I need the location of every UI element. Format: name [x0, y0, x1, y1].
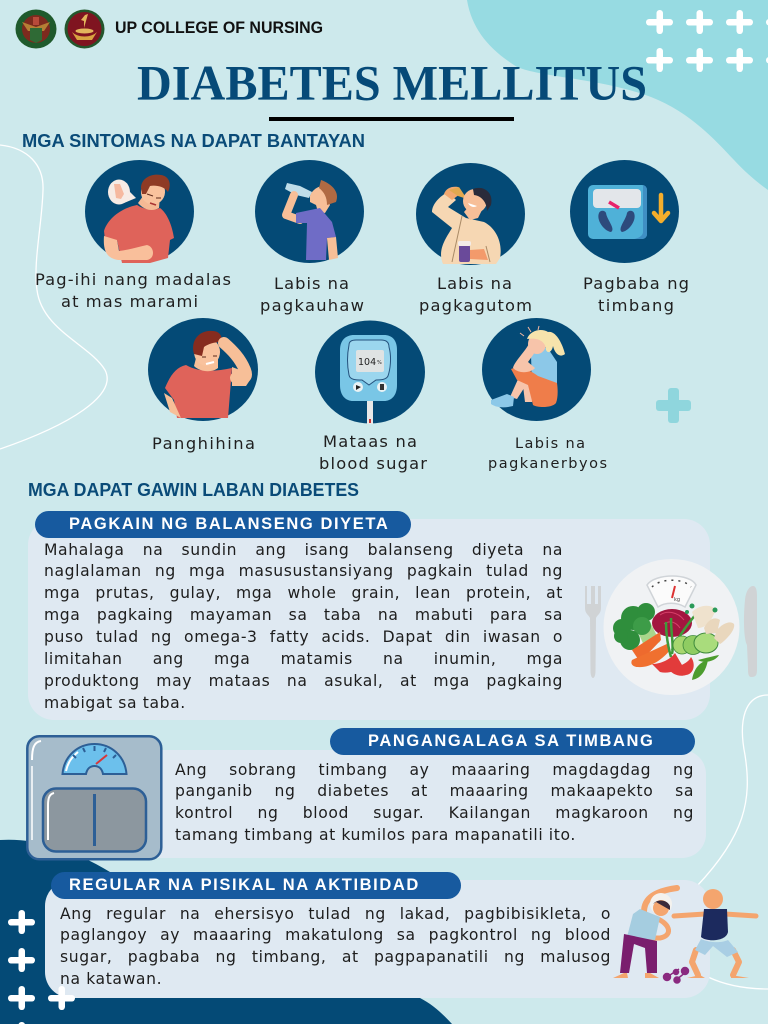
heading: symptoms: MGA SINTOMAS NA DAPAT BANTAYAN [22, 131, 365, 151]
icon: stretching couple [613, 888, 756, 983]
icon: glucose meter [315, 320, 425, 424]
logo: university seal [16, 10, 56, 48]
icon: nervousness [482, 318, 591, 421]
label: high blood sugar: Mataas na [323, 432, 417, 451]
heading pill: weight care: PANGANGALAGA SA TIMBANG [368, 732, 654, 750]
body text: physical activity: sugar, pagbaba ng timbang, at pagpapanatili ng malusog [60, 948, 611, 966]
body text: balanced diet: mga pagkaing mayaman sa taba na mabuti para sa [44, 606, 563, 624]
label: excessive thirst: Labis na [274, 274, 349, 293]
right white curve [697, 695, 768, 989]
label: excessive hunger [419, 274, 532, 315]
label: excessive hunger: pagkagutom [419, 296, 532, 315]
body text: balanced diet: limitahan ang mga matamis na inumin, mga [44, 650, 563, 668]
body text: balanced diet: produktong may mataas na asukal, at mga pagkaing [44, 672, 563, 690]
label: weight loss [583, 274, 689, 315]
heading pill: weight care [330, 728, 695, 755]
heading pill: balanced diet: PAGKAIN NG BALANSENG DIYETA [69, 515, 389, 533]
body text: balanced diet: puso tulad ng omega-3 fatty acids. Dapat din iwasan o [44, 628, 563, 646]
icon: weighing scale [27, 736, 161, 859]
icon: excessive thirst [255, 160, 364, 263]
panel: weight care [150, 750, 706, 858]
icon: weakness [148, 318, 258, 421]
heading: what to do: MGA DAPAT GAWIN LABAN DIABETES [28, 480, 359, 500]
body text: balanced diet: mga prutas, gulay, mga whole grain, lean protein, at [44, 584, 563, 602]
man [674, 889, 756, 978]
heading pill: physical activity: REGULAR NA PISIKAL NA AKTIBIDAD [69, 876, 420, 894]
fork [585, 586, 601, 678]
icon: glucose meter: 104 [358, 357, 376, 368]
label: high blood sugar [319, 432, 427, 473]
header: college name: UP COLLEGE OF NURSING [115, 18, 323, 37]
label: nervousness: pagkanerbyos [488, 456, 607, 472]
label: nervousness: Labis na [515, 436, 585, 452]
label: high blood sugar: blood sugar [319, 454, 427, 473]
label: nervousness [488, 436, 607, 472]
icon: plate with scale and vegetables [585, 559, 757, 695]
panel: physical activity [45, 880, 710, 998]
body text: physical activity: paglangoy ay maaaring makatulong sa pagkontrol ng blood [60, 926, 611, 944]
title underline [269, 117, 514, 121]
bottom left plus signs [8, 910, 75, 1024]
body text: balanced diet [44, 540, 563, 712]
label: weight loss: Pagbaba ng [583, 274, 689, 293]
heading pill: physical activity [51, 872, 461, 899]
icon: glucose meter: % [377, 360, 382, 366]
body text: physical activity: na katawan. [60, 970, 162, 988]
panel: balanced diet [28, 519, 710, 720]
label: excessive thirst [260, 274, 364, 315]
icon: frequent urination [85, 160, 194, 263]
top right teal blob [467, 0, 768, 190]
label: frequent urination: Pag-ihi nang madalas [35, 270, 231, 289]
bottom left navy blob [0, 840, 452, 1024]
body text: weight care: panganib ng diabetes at maaaring makaapekto sa [175, 782, 694, 800]
body text: balanced diet: mabigat sa taba. [44, 694, 186, 712]
icon: weight loss scale [570, 160, 679, 263]
knife [744, 586, 757, 677]
label: weakness: Panghihina [152, 434, 255, 453]
label: frequent urination: at mas marami [61, 292, 198, 311]
label: weight loss: timbang [598, 296, 674, 315]
heading pill: balanced diet [35, 511, 411, 538]
teal plus sign [656, 388, 691, 423]
body text: physical activity [60, 904, 611, 988]
body text: weight care [175, 760, 694, 844]
left white curve [0, 145, 107, 449]
body text: balanced diet: Mahalaga na sundin ang isang balanseng diyeta na [44, 540, 563, 558]
body text: balanced diet: naglalaman ng mga masusustansiyang pagkain tulad ng [44, 562, 563, 580]
woman [613, 888, 677, 978]
icon: plate with scale and vegetables: kg [674, 597, 680, 603]
label: frequent urination [35, 270, 231, 311]
label: excessive hunger: Labis na [437, 274, 512, 293]
dumbbells [664, 968, 688, 983]
title: DIABETES MELLITUS [137, 54, 647, 110]
body text: weight care: kontrol ng blood sugar. Kailangan magkaroon ng [175, 804, 694, 822]
body text: physical activity: Ang regular na ehersisyo tulad ng lakad, pagbibisikleta, o [60, 904, 611, 922]
label: excessive thirst: pagkauhaw [260, 296, 364, 315]
top right plus signs [646, 10, 768, 72]
logo: college of nursing seal [64, 10, 104, 48]
body text: weight care: tamang timbang at kumilos para mapanatili ito. [175, 826, 576, 844]
icon: excessive hunger [416, 163, 525, 265]
body text: weight care: Ang sobrang timbang ay maaaring magdagdag ng [175, 760, 694, 778]
